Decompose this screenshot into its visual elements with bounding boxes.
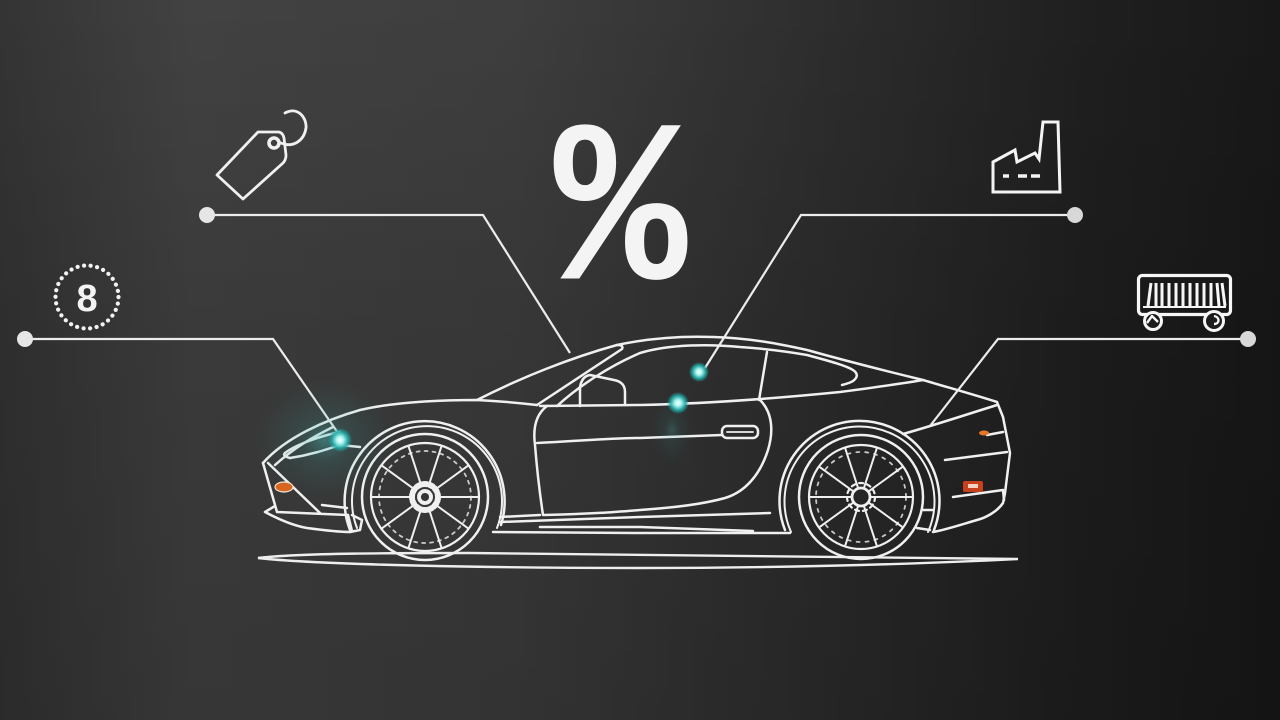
side window xyxy=(540,345,923,406)
icon: freight wagon xyxy=(1138,276,1230,330)
icon: dollar coin xyxy=(56,266,118,328)
car body outline xyxy=(263,337,1010,532)
glow: door point xyxy=(650,392,694,466)
sills xyxy=(493,513,790,533)
windshield and mirror xyxy=(537,345,625,406)
leader line: wagon to rear xyxy=(930,331,1256,426)
headlight xyxy=(275,427,360,465)
icon: factory xyxy=(993,122,1060,192)
door and handle xyxy=(534,400,771,515)
front indicator xyxy=(275,482,293,492)
percent symbol: % xyxy=(554,87,688,349)
glow: upper window point xyxy=(689,362,709,382)
ground reflection xyxy=(258,553,1018,568)
rear panels and lights xyxy=(903,405,1007,530)
icon: dollar coin: 8 xyxy=(76,278,98,320)
rear wheel xyxy=(780,421,939,559)
leader line: dollar to headlight xyxy=(17,331,338,433)
leader line: factory to window xyxy=(705,207,1083,368)
icon: price tag xyxy=(217,111,306,199)
leader line: tag to windshield xyxy=(199,207,570,353)
car illustration xyxy=(263,337,1010,560)
front wheel xyxy=(345,421,505,560)
glow: headlight xyxy=(255,380,395,500)
